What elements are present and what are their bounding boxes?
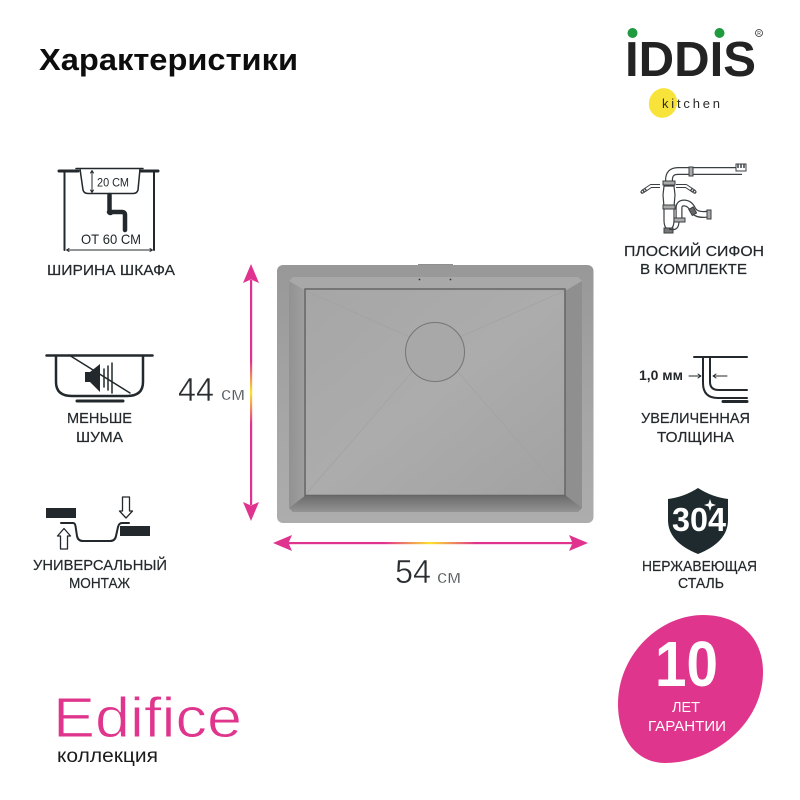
icon: increased thickness: 1,0 мм — [639, 367, 683, 383]
label: stainless steel: НЕРЖАВЕЮЩАЯ — [642, 558, 757, 575]
label: increased thickness — [641, 410, 750, 446]
collection name: Edifice — [53, 686, 242, 750]
icon: 304 steel shield: 304 — [672, 501, 727, 538]
label: universal mounting: МОНТАЖ — [69, 575, 130, 592]
label: flat siphon — [624, 242, 764, 278]
icon: flat siphon — [641, 164, 746, 233]
dimension: 44 cm: 44 — [178, 371, 214, 408]
logo: IDDIS kitchen: IDDIS — [625, 33, 756, 87]
label: less noise: МЕНЬШЕ — [67, 410, 132, 427]
badge: 10 year warranty: ЛЕТ — [672, 699, 700, 716]
label: increased thickness: УВЕЛИЧЕННАЯ — [641, 410, 750, 427]
arrow: height dimension — [243, 264, 259, 521]
badge: 10 year warranty: ГАРАНТИИ — [648, 718, 726, 735]
label: universal mounting — [33, 556, 167, 592]
sink illustration — [277, 264, 594, 523]
label: flat siphon: В КОМПЛЕКТЕ — [640, 261, 747, 278]
icon: increased thickness — [639, 357, 747, 402]
logo: IDDIS kitchen — [625, 28, 762, 123]
dimension: 44 cm — [178, 371, 245, 408]
label: less noise — [67, 410, 132, 446]
label: stainless steel — [642, 558, 757, 592]
icon: 304 steel shield — [668, 488, 728, 554]
logo: IDDIS kitchen: R — [757, 31, 761, 37]
icon: cabinet width: ОТ 60 СМ — [81, 231, 141, 247]
label: stainless steel: СТАЛЬ — [678, 575, 724, 592]
dimension: 54 cm — [395, 553, 461, 590]
label: less noise: ШУМА — [76, 429, 123, 446]
icon: universal mounting — [46, 497, 150, 549]
label: universal mounting: УНИВЕРСАЛЬНЫЙ — [33, 556, 167, 574]
logo: IDDIS kitchen: kitchen — [662, 96, 720, 111]
icon: less noise — [46, 355, 152, 401]
icon: cabinet width — [59, 168, 158, 252]
label: flat siphon: ПЛОСКИЙ СИФОН — [624, 242, 764, 260]
arrow: width dimension — [273, 535, 588, 551]
dimension: 44 cm: см — [221, 384, 245, 404]
dimension: 54 cm: 54 — [395, 553, 431, 590]
icon: cabinet width: 20 СМ — [97, 178, 129, 190]
badge: 10 year warranty: 10 — [655, 628, 718, 700]
label: increased thickness: ТОЛЩИНА — [657, 429, 734, 446]
title: Характеристики — [39, 42, 298, 77]
collection name: коллекция — [57, 746, 158, 767]
badge: 10 year warranty — [618, 615, 763, 763]
label: cabinet width: ШИРИНА ШКАФА — [47, 262, 175, 279]
dimension: 54 cm: см — [437, 567, 461, 587]
